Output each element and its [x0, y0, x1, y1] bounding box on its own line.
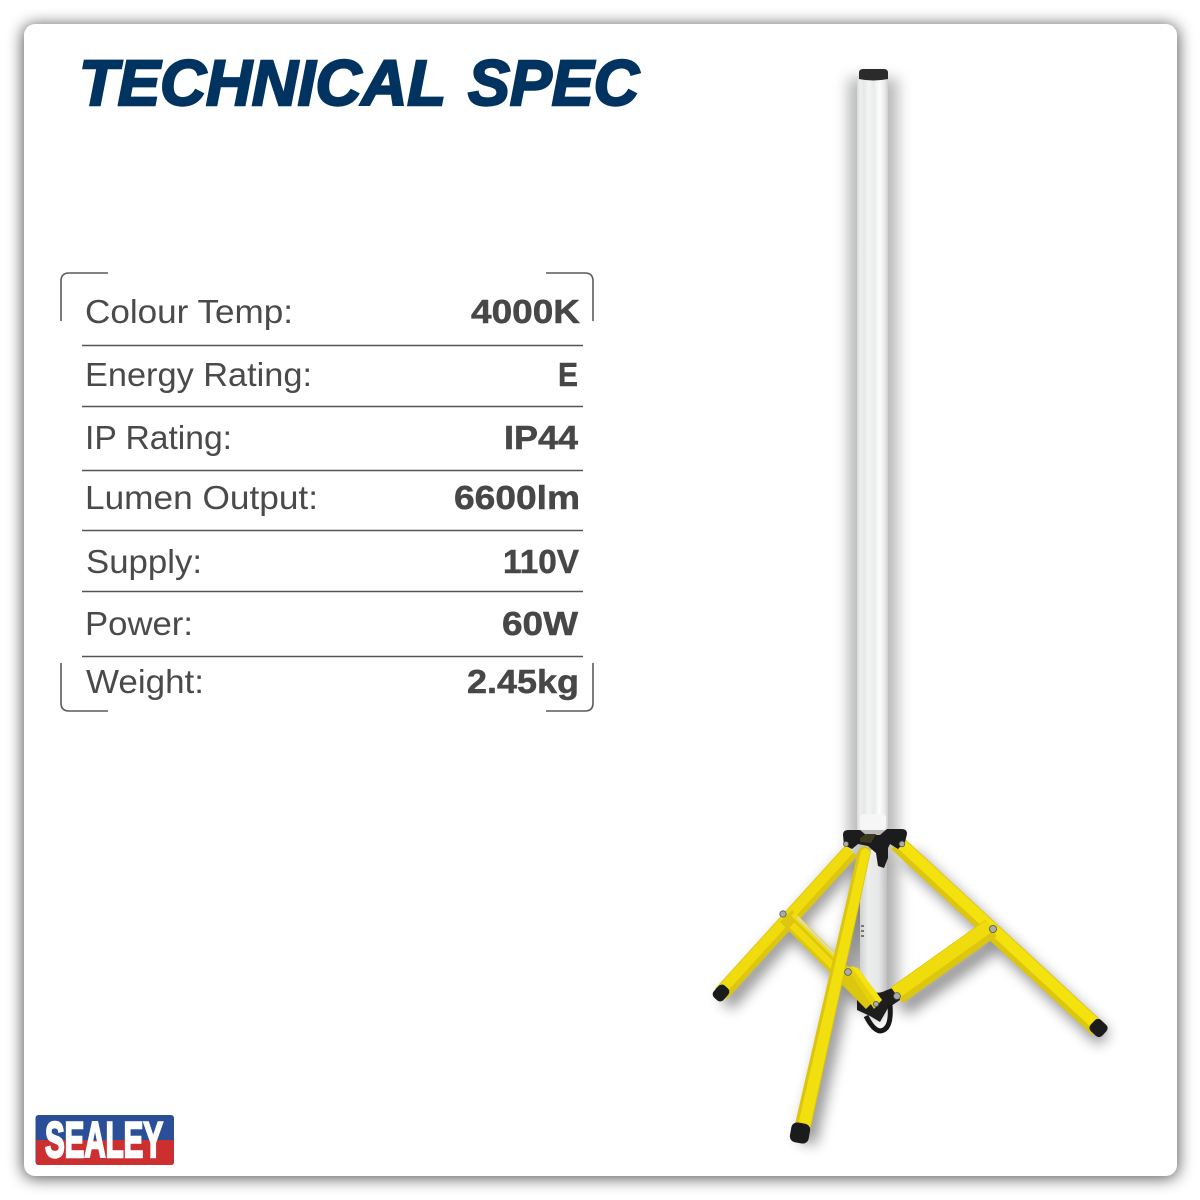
top bracket — [843, 829, 907, 868]
row: energy rating: Energy Rating: — [85, 357, 312, 394]
corner brackets — [61, 273, 593, 711]
product: tripod work light — [711, 69, 1109, 1144]
lower bracket and cable — [857, 986, 900, 1031]
front leg — [795, 846, 871, 1127]
row: weight — [86, 663, 579, 701]
logo: Sealey: SEALEY — [45, 1112, 163, 1168]
row: colour temp — [85, 293, 580, 331]
title — [79, 47, 640, 119]
bolts — [780, 841, 997, 1007]
row: supply: 110V — [503, 543, 579, 580]
row: ip rating: IP44 — [504, 419, 579, 456]
light tube — [857, 76, 888, 830]
tube shadow — [848, 78, 898, 1000]
leg shadows — [726, 856, 1104, 1143]
row: energy rating — [85, 356, 578, 394]
row: ip rating: IP Rating: — [85, 420, 232, 457]
row: weight: 2.45kg — [467, 663, 579, 700]
right leg — [897, 841, 1099, 1029]
row: supply — [86, 543, 579, 581]
row: lumen output — [85, 479, 580, 517]
lower pole — [860, 850, 887, 992]
spec table — [61, 273, 593, 711]
rear left leg — [720, 849, 851, 994]
pole switches — [861, 926, 864, 936]
row: energy rating: E — [558, 356, 578, 393]
title: TECHNICAL — [79, 47, 446, 119]
row: power: Power: — [85, 606, 193, 643]
left brace — [786, 914, 872, 1003]
row: colour temp: 4000K — [471, 293, 580, 330]
title: SPEC — [468, 47, 640, 119]
row: lumen output: 6600lm — [454, 479, 580, 516]
logo: Sealey — [36, 1112, 174, 1168]
end cap — [859, 69, 888, 80]
lower link arm — [846, 966, 882, 1009]
row: colour temp: Colour Temp: — [85, 294, 293, 331]
row: ip rating — [85, 419, 579, 457]
row: power: 60W — [502, 605, 579, 642]
right brace — [895, 926, 991, 995]
rubber feet — [711, 983, 1109, 1144]
row: lumen output: Lumen Output: — [85, 480, 318, 517]
row: supply: Supply: — [86, 544, 202, 581]
row: weight: Weight: — [86, 664, 204, 701]
row: power — [85, 605, 579, 643]
